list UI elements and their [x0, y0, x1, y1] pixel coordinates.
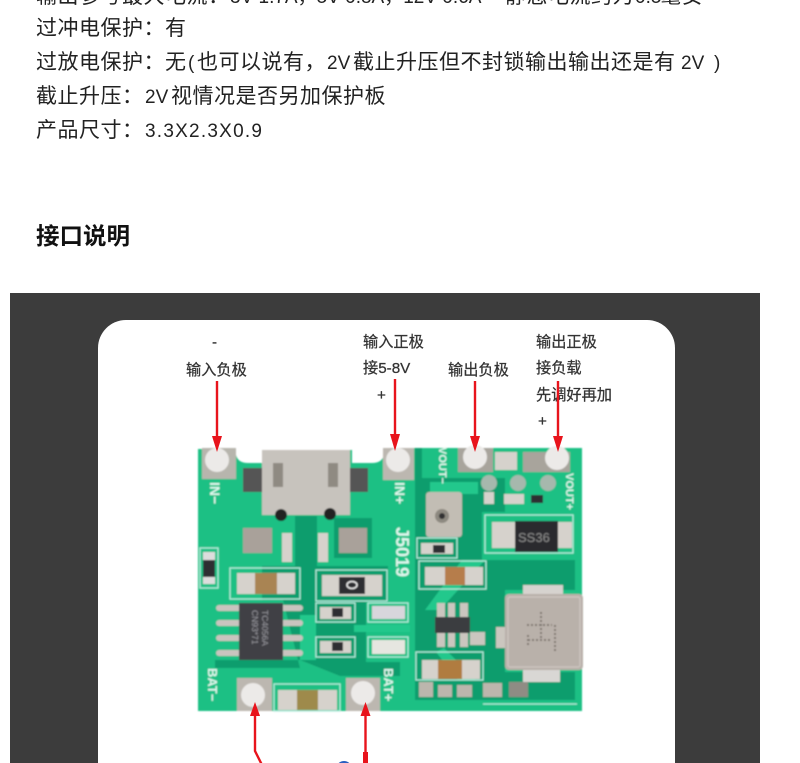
silk text: IN-: IN− [207, 482, 223, 504]
label: input negative: - [212, 334, 217, 351]
label: input positive [363, 334, 424, 404]
charger IC TC4056A [216, 603, 303, 660]
silkscreen line [483, 703, 577, 705]
silk text: VOUT+: VOUT+ [563, 473, 575, 510]
spec text: over-discharge protection: 2V [327, 53, 351, 74]
bottom small pads [419, 682, 528, 697]
resistor 122 [200, 548, 218, 588]
label: output positive: 先调好再加 [536, 387, 612, 404]
label: input positive: + [377, 387, 386, 404]
silk text: VOUT-: VOUT− [436, 447, 448, 484]
spec text: over-discharge protection: 2V [681, 53, 705, 74]
label: output positive: 输出正极 [536, 334, 597, 351]
label: output positive: 接负载 [536, 360, 582, 377]
diode SS36 [485, 515, 573, 553]
arrow: input negative [212, 381, 222, 452]
spec text: product size: 3.3X2.3X0.9 [145, 121, 262, 142]
spec text: over-discharge protection: ) [714, 53, 720, 74]
pad: IN+ [383, 448, 414, 480]
circuit board [198, 445, 583, 711]
spec text: over-discharge protection: 也可以说有， [197, 46, 326, 76]
arrow: output negative [470, 381, 480, 452]
spec text: over-discharge protection: 过放电保护：无 [36, 46, 186, 76]
test points and small resistor [481, 475, 556, 504]
bright copper regions [300, 482, 485, 680]
silk text: BAT+: BAT+ [381, 668, 396, 702]
silk text: J5019: J5019 [392, 527, 412, 577]
arrow: output positive [553, 381, 563, 452]
pad: VOUT- [458, 445, 517, 472]
label: input negative: 输入负极 [186, 362, 247, 379]
pad: IN- [202, 448, 236, 479]
label: input positive: 输入正极 [363, 334, 424, 351]
USB anchor pads [243, 528, 367, 562]
label: output negative: 输出负极 [448, 362, 509, 379]
pad: VOUT+ [523, 446, 570, 472]
capacitor 1 [230, 568, 300, 599]
spec text: cut-off boost: 视情况是否另加保护板 [171, 80, 386, 110]
silk text: BAT-: BAT− [205, 668, 220, 702]
zero-ohm resistor [316, 570, 387, 601]
board base [198, 448, 582, 711]
spec text: over-discharge protection: ( [188, 53, 195, 74]
spec text: product size: 产品尺寸： [36, 114, 144, 144]
heading: interface description: 接口说明 [36, 217, 130, 251]
label: output positive [536, 334, 612, 430]
trim potentiometer [426, 492, 462, 537]
label: input positive: 接5-8V [363, 360, 411, 377]
copper traces [215, 448, 575, 700]
resistors and LEDs [316, 603, 408, 657]
diode SS36: SS36 [518, 530, 550, 545]
label: output positive: + [538, 413, 547, 430]
pad: BAT- [237, 678, 272, 711]
capacitor 3 [416, 652, 483, 680]
pad: BAT+ [346, 678, 380, 711]
spec text: over-discharge protection: 截止升压但不封锁输出输出还是有 [353, 46, 676, 76]
capacitor bottom [274, 684, 340, 711]
arrow: battery negative [250, 702, 262, 763]
icon: blue dot [336, 761, 352, 763]
inductor [505, 585, 583, 682]
panel: white card [98, 320, 675, 763]
regulator SOT IC [435, 603, 505, 648]
arrow: input positive [390, 379, 400, 451]
panel: dark background [10, 293, 760, 763]
silk text: IN+: IN+ [392, 482, 408, 504]
spec text: cut-off boost: 2V [145, 87, 169, 108]
resistor 222 [417, 538, 457, 558]
arrow: battery positive [360, 702, 370, 763]
capacitor 2 [419, 561, 486, 589]
spec text: overcharge protection: 过冲电保护：有 [36, 12, 186, 42]
spec text: cut-off boost: 截止升压： [36, 80, 144, 110]
charger IC TC4056A: TC4056A [260, 610, 270, 646]
label: input negative [186, 334, 247, 379]
micro USB connector [243, 450, 368, 521]
charger IC TC4056A: CN93*71 [250, 610, 260, 645]
